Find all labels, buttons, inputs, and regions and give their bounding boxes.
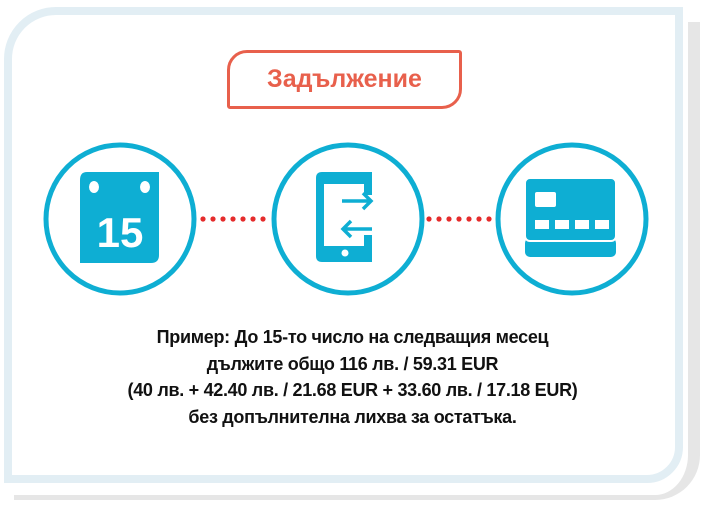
- dotted connector right: [426, 216, 492, 222]
- title box: [227, 50, 462, 109]
- example text: [128, 327, 577, 427]
- icon: credit card: [498, 145, 646, 293]
- title box: Задължение: [267, 65, 422, 93]
- example text: дължите общо 116 лв. / 59.31 EUR: [207, 354, 498, 374]
- icon: calendar 15: [46, 145, 194, 293]
- icon: phone transfer: [274, 145, 422, 293]
- dotted connector left: [200, 216, 266, 222]
- example text: (40 лв. + 42.40 лв. / 21.68 EUR + 33.60 лв. / 17.18 EUR): [128, 380, 577, 400]
- example text: без допълнителна лихва за остатъка.: [188, 406, 517, 426]
- icon: calendar 15: 15: [97, 209, 143, 256]
- example text: Пример: До 15-то число на следващия месец: [157, 327, 548, 347]
